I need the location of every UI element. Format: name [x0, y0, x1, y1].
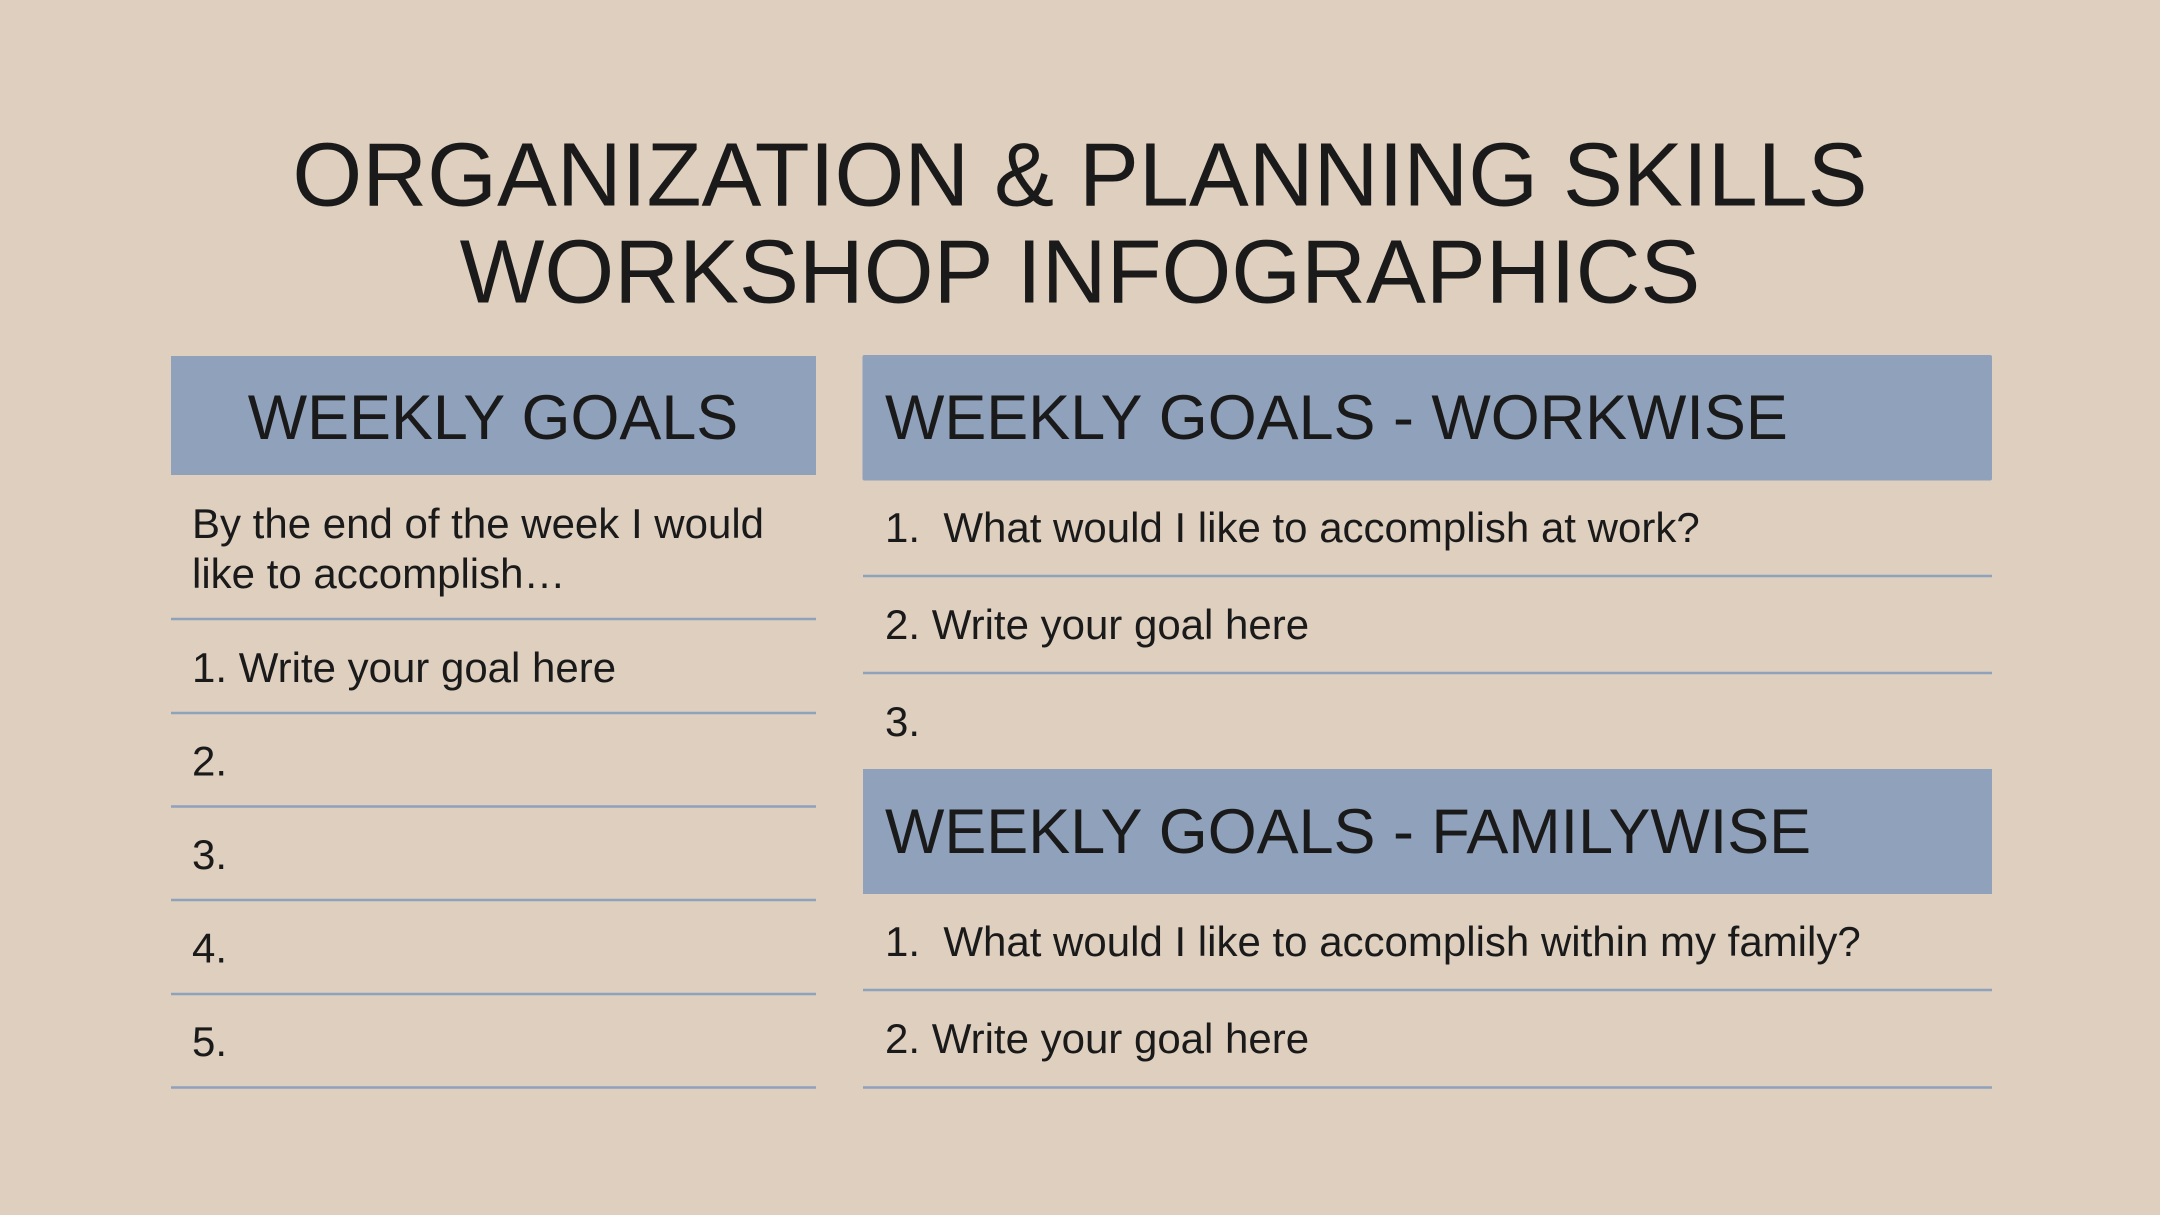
- goal item 2: 2.: [192, 738, 227, 784]
- panel: weekly goals familywise: [863, 769, 1992, 1088]
- panel: weekly goals: [171, 356, 816, 1088]
- work item 3: 3.: [885, 698, 920, 745]
- heading: familywise: [863, 769, 1992, 894]
- text block: intro: By the end of the week I would: [192, 500, 764, 547]
- heading: workwise: [862, 355, 1992, 480]
- heading: weekly goals: WEEKLY GOALS: [248, 383, 738, 453]
- title: [292, 126, 1868, 322]
- work item 2: 2. Write your goal here: [885, 601, 1309, 648]
- heading: workwise: WEEKLY GOALS - WORKWISE: [885, 383, 1788, 453]
- text block: intro: [192, 500, 764, 597]
- family item 1: 1. What would I like to accomplish within my family?: [885, 918, 1861, 965]
- goal item 5: 5.: [192, 1018, 227, 1065]
- goal item 4: 4.: [192, 924, 227, 972]
- goal item 3: 3.: [192, 831, 227, 878]
- family item 2: 2. Write your goal here: [885, 1015, 1309, 1062]
- text block: intro: like to accomplish…: [192, 550, 565, 597]
- title: WORKSHOP INFOGRAPHICS: [460, 222, 1700, 322]
- heading: weekly goals: [171, 356, 816, 475]
- heading: familywise: WEEKLY GOALS - FAMILYWISE: [885, 797, 1811, 867]
- work item 1: 1. What would I like to accomplish at work?: [885, 504, 1700, 551]
- title: ORGANIZATION & PLANNING SKILLS: [292, 126, 1868, 226]
- panel: weekly goals workwise: [862, 355, 1992, 745]
- goal item 1: 1. Write your goal here: [192, 644, 616, 691]
